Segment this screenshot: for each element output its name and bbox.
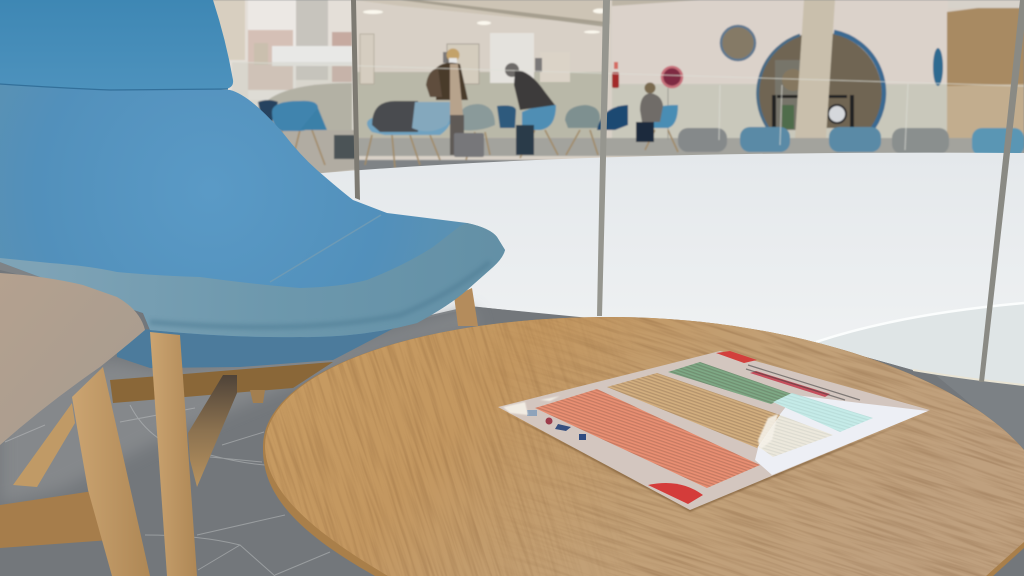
chair short leg <box>250 390 265 403</box>
headrest seam <box>0 84 228 90</box>
table top <box>265 317 1024 576</box>
armchair <box>0 0 505 576</box>
doors and wall signs <box>360 33 570 84</box>
glass railing top line <box>232 62 1024 150</box>
waiting room chairs <box>258 100 678 168</box>
fire extinguisher <box>612 62 619 88</box>
concrete column <box>795 0 835 138</box>
person: man leaning <box>505 63 555 155</box>
foreground stool <box>0 273 150 576</box>
far wall <box>0 0 1024 160</box>
large round opening <box>758 32 884 130</box>
stool back leg <box>13 403 75 487</box>
round wooden table <box>263 317 1024 576</box>
chair front leg <box>150 332 197 576</box>
salmon panel <box>535 389 760 488</box>
chair shell <box>0 84 505 337</box>
top red banner <box>716 351 757 363</box>
chair underside <box>117 325 400 368</box>
partner logos <box>527 410 586 440</box>
dark heading lines <box>746 365 860 400</box>
glass post 1 <box>351 0 360 200</box>
seat lip <box>0 223 505 337</box>
chair rear leg <box>454 288 478 326</box>
window on left <box>215 0 355 175</box>
stool front leg <box>72 367 150 576</box>
white curved balustrade <box>300 153 1024 385</box>
blue oval window <box>933 48 943 86</box>
seat seam <box>270 215 381 282</box>
headrest <box>0 0 233 90</box>
lower white band reflection <box>815 303 1024 385</box>
glare highlights <box>503 396 778 450</box>
wall porthole circle <box>721 26 755 60</box>
chair frame rail <box>110 362 333 403</box>
green panel <box>668 362 792 404</box>
stool rail <box>0 490 110 548</box>
wood grain right <box>556 317 1024 576</box>
leaflet shadow <box>499 410 932 512</box>
cream panel <box>759 415 833 457</box>
red round sign <box>662 67 682 140</box>
floor tile lines <box>5 405 330 576</box>
plastic glare <box>755 395 928 475</box>
floor <box>0 270 1024 576</box>
wood grain left <box>266 323 557 576</box>
glass post 2 <box>597 0 610 316</box>
background: far interior behind glass <box>0 0 1024 175</box>
stool cushion <box>0 273 145 445</box>
leaflet <box>498 351 932 512</box>
cyan panel <box>773 393 873 432</box>
person: woman with mask <box>426 48 484 157</box>
ceiling lights <box>363 8 607 34</box>
person: seated visitor <box>636 82 663 142</box>
tan panel <box>607 373 780 448</box>
glass post 3 <box>979 0 1024 382</box>
bottom red badge <box>648 483 703 504</box>
chair brace <box>188 375 237 487</box>
lip shadow <box>150 262 490 327</box>
leaflet sheet <box>498 351 930 510</box>
red leaflet heading bar <box>750 371 830 397</box>
table edge <box>263 317 1024 576</box>
lighter floor near stool and chair <box>0 310 1024 505</box>
pouffes <box>678 127 1024 156</box>
